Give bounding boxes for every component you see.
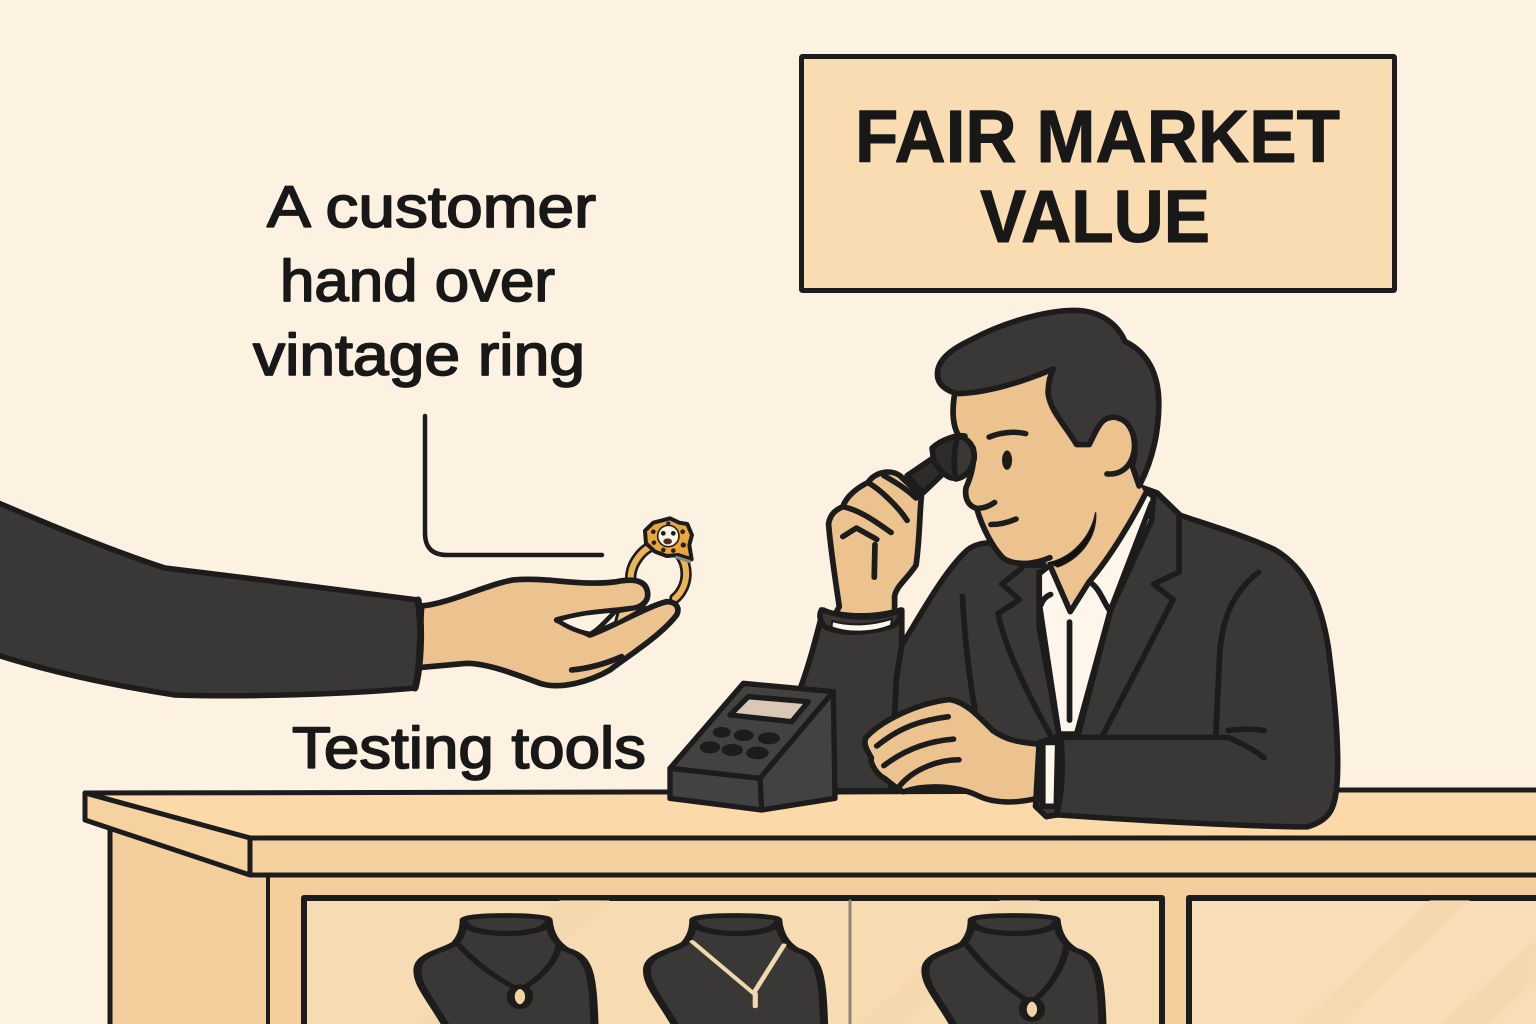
customer sleeve cuff edge: [415, 600, 421, 688]
callout: customer label: hand over: [280, 249, 555, 314]
hair: [937, 310, 1159, 486]
customer arm sleeve: [0, 501, 421, 696]
vintage ring: [631, 518, 692, 598]
ear line: [1107, 438, 1135, 474]
counter base cabinet: [110, 825, 1536, 1024]
cabinet edge: [266, 876, 270, 1024]
lower hand: [865, 700, 1062, 817]
counter left end: [85, 793, 250, 875]
suit torso: [889, 488, 1338, 827]
window reflections: [420, 900, 1536, 1024]
sign: fair market value: [802, 56, 1394, 290]
loupe: [907, 436, 974, 493]
callout leader line: [425, 416, 602, 555]
neck: [1046, 469, 1145, 605]
callout: customer label: vintage ring: [253, 323, 585, 388]
label: testing tools: Testing tools: [292, 716, 646, 781]
device body: [670, 683, 835, 810]
appraiser: [798, 310, 1338, 827]
device edges: [670, 692, 833, 810]
sign: fair market value: VALUE: [980, 175, 1210, 258]
display window left: [304, 898, 1162, 1024]
face: [953, 372, 1139, 563]
display window right: [1189, 898, 1536, 1024]
facial features: [989, 432, 1026, 525]
counter: [85, 790, 1536, 1024]
bust 2: [647, 915, 824, 1024]
jaw shadow: [1048, 513, 1096, 567]
neck and collar lines: [1041, 494, 1146, 720]
customer hand: [418, 579, 678, 686]
window divider: [848, 901, 852, 1024]
callout: customer label: [253, 175, 596, 388]
counter front lip: [250, 838, 1536, 875]
device buttons: [700, 727, 780, 759]
callout: customer label: A customer: [267, 175, 596, 240]
left sleeve: [798, 610, 902, 791]
shirt: [1039, 489, 1153, 734]
jacket lines: [962, 503, 1264, 758]
face outline: [953, 396, 1050, 563]
bust 3: [925, 915, 1103, 1024]
counter top surface: [85, 790, 1536, 838]
raised hand: [820, 472, 921, 632]
bust 1: [417, 915, 595, 1024]
sign: fair market value: FAIR MARKET: [855, 95, 1340, 178]
testing tool device: [670, 683, 835, 810]
necklace busts: [417, 915, 1103, 1024]
device screen: [730, 697, 808, 722]
